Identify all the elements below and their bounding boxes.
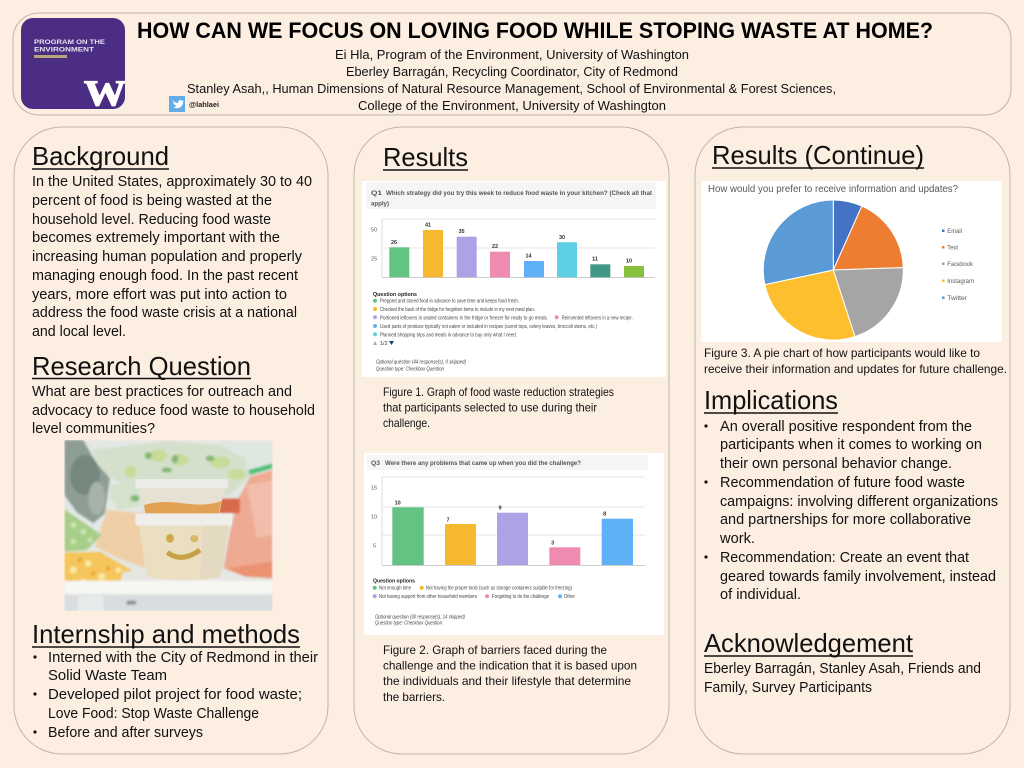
chart: figure 1 food waste strategies: 41 xyxy=(425,222,431,228)
pie legend: Instagram xyxy=(947,278,974,285)
logo: Program on the Environment: PROGRAM ON THE xyxy=(34,39,106,46)
caption: figure 3 xyxy=(704,346,1007,376)
caption: figure 2: challenge and the indication that it is based upon xyxy=(383,658,637,672)
list: implications: An overall positive respondent from the xyxy=(720,419,972,435)
caption: figure 2: the barriers. xyxy=(383,690,445,704)
caption: figure 1: that participants selected to use during their xyxy=(383,400,597,414)
chart: figure 1 food waste strategies: Checked the back of the fridge for forgotten items to include in my next meal plan. xyxy=(380,307,535,313)
icon: twitter xyxy=(169,96,185,112)
chart: figure 1 food waste strategies: Which strategy did you try this week to reduce food waste in your kitchen? (Check all that xyxy=(386,190,653,197)
text: background paragraph: becomes extremely important with the xyxy=(32,230,280,246)
chart: figure 1 food waste strategies: 50 xyxy=(371,228,377,234)
chart: figure 1 food waste strategies: Optional question (44 response(s), 0 skipped) xyxy=(376,360,466,366)
authors xyxy=(187,47,836,113)
text: acknowledgement: Family, Survey Participants xyxy=(704,680,872,696)
chart: figure 2 barriers: 5 xyxy=(373,544,376,550)
authors: College of the Environment, University of Washington xyxy=(358,98,666,113)
chart: figure 1 food waste strategies: 11 xyxy=(592,256,598,262)
list: internship and methods: Solid Waste Team xyxy=(48,668,167,684)
caption: figure 1: Figure 1. Graph of food waste reduction strategies xyxy=(383,385,614,399)
chart: figure 1 food waste strategies: 10 xyxy=(626,258,632,264)
chart: figure 1 food waste strategies: Q1 xyxy=(371,190,383,197)
text: background paragraph xyxy=(32,174,312,340)
chart: figure 2 barriers: Not enough time xyxy=(379,586,411,592)
title: HOW CAN WE FOCUS ON LOVING FOOD WHILE STOPING WASTE AT HOME? xyxy=(137,18,933,43)
text: research question xyxy=(32,384,315,437)
text: background paragraph: years, more effort was put into action to xyxy=(32,287,287,303)
chart: figure 1 food waste strategies: Reinvented leftovers in a new recipe. xyxy=(562,315,633,321)
text: background paragraph: and local level. xyxy=(32,324,126,340)
text: background paragraph: address the food waste crisis at a national xyxy=(32,305,297,321)
pie legend xyxy=(942,228,974,302)
chart: figure 1 food waste strategies: 30 xyxy=(559,235,565,241)
heading: Internship and methods: Internship and methods xyxy=(32,619,300,649)
chart: figure 1 food waste strategies: Planned shopping trips and meals in advance to buy only what I need. xyxy=(380,332,517,338)
list: implications: participants when it comes to working on xyxy=(720,437,982,453)
chart: figure 2 barriers: Optional question (30 response(s), 14 skipped) xyxy=(375,614,465,620)
chart: figure 2 barriers: Not having the proper tools (such as storage containers suitable for freezing) xyxy=(426,586,572,592)
pie legend: Email xyxy=(947,228,962,235)
chart: figure 2 barriers: Question options xyxy=(373,578,415,584)
caption: figure 2: Figure 2. Graph of barriers faced during the xyxy=(383,643,607,657)
chart: figure 2 barriers: Q3 xyxy=(371,460,380,467)
list: internship and methods: Before and after surveys xyxy=(48,725,203,741)
chart: figure 2 barriers: Were there any problems that came up when you did the challenge? xyxy=(385,460,581,467)
list: implications xyxy=(704,419,998,603)
pie slices xyxy=(763,200,903,340)
panel: left column xyxy=(14,127,328,754)
chart: figure 1 food waste strategies: Prepped and stored food in advance to save time and keeps food fresh. xyxy=(380,298,519,304)
list: internship and methods xyxy=(33,650,318,741)
chart: figure 1 food waste strategies: 25 xyxy=(371,256,377,262)
panel: right column xyxy=(695,127,1010,754)
chart: figure 2 barriers: 8 xyxy=(603,512,606,518)
chart: figure 1 food waste strategies: 14 xyxy=(525,254,532,260)
authors: Eberley Barragán, Recycling Coordinator, City of Redmond xyxy=(346,64,678,79)
list: implications: of individual. xyxy=(720,587,801,603)
chart: figure 2 barriers xyxy=(364,453,664,635)
heading: Background: Background xyxy=(32,141,169,171)
top container xyxy=(135,479,228,513)
list: implications: Recommendation of future food waste xyxy=(720,475,965,491)
list: internship and methods: Interned with the City of Redmond in their xyxy=(48,650,318,666)
heading: Acknowledgement: Acknowledgement xyxy=(704,628,914,658)
header banner xyxy=(13,13,1011,115)
list: internship and methods: Love Food: Stop Waste Challenge xyxy=(48,706,259,722)
heading: Research Question: Research Question xyxy=(32,351,251,381)
chart: figure 1 food waste strategies: 22 xyxy=(492,244,498,250)
authors: Ei Hla, Program of the Environment, University of Washington xyxy=(335,47,689,62)
chart: figure 2 barriers: 9 xyxy=(498,506,502,512)
caption: figure 2 xyxy=(383,643,637,704)
chart: figure 2 barriers: Question type: Checkbox Question xyxy=(375,620,442,626)
list: implications: geared towards family involvement, instead xyxy=(720,569,996,585)
chart: figure 1 food waste strategies: apply) xyxy=(371,200,389,208)
logo: Program on the Environment xyxy=(21,18,126,113)
list: implications: Recommendation: Create an event that xyxy=(720,550,969,566)
text: research question: What are best practices for outreach and xyxy=(32,384,292,400)
text: background paragraph: managing enough food. In the past recent xyxy=(32,268,298,284)
chart: figure 1 food waste strategies: Question type: Checkbox Question xyxy=(376,366,444,372)
text: acknowledgement xyxy=(704,661,981,696)
heading: Implications: Implications xyxy=(704,385,838,415)
heading: Results (Continue): Results (Continue) xyxy=(712,140,924,170)
chart: figure 2 barriers: Forgetting to do the challenge xyxy=(492,594,549,600)
chart: figure 3 pie chart xyxy=(701,181,1002,342)
bottom container with smiley xyxy=(135,514,232,580)
chart: figure 1 food waste strategies: 26 xyxy=(391,240,397,246)
logo: Program on the Environment: ENVIRONMENT xyxy=(34,46,94,54)
twitter handle: @lahlaei xyxy=(189,100,219,109)
chart: figure 2 barriers: 10 xyxy=(395,500,401,506)
logo: Program on the Environment: W xyxy=(84,73,126,113)
chart: figure 3 pie chart: How would you prefer to receive information and updates? xyxy=(708,184,958,195)
caption: figure 1: challenge. xyxy=(383,416,430,430)
heading: Results: Results xyxy=(383,142,468,172)
caption: figure 3: receive their information and updates for future challenge. xyxy=(704,362,1007,376)
text: background paragraph: In the United States, approximately 30 to 40 xyxy=(32,174,312,190)
chart: figure 2 barriers: 10 xyxy=(371,514,377,520)
chart: figure 2 barriers: 15 xyxy=(371,486,377,492)
chart: figure 1 food waste strategies: Question options xyxy=(373,292,417,298)
text: background paragraph: increasing human population and properly xyxy=(32,249,303,265)
pie legend: Twitter xyxy=(947,295,968,302)
panel: middle column xyxy=(354,127,669,754)
chart: figure 1 food waste strategies xyxy=(362,181,666,377)
text: background paragraph: household level. Reducing food waste xyxy=(32,212,271,228)
authors: Stanley Asah,, Human Dimensions of Natural Resource Management, School of Environmental & Forest Sciences, xyxy=(187,81,836,96)
list: internship and methods: Developed pilot project for food waste; xyxy=(48,687,302,703)
pie legend: Facebook xyxy=(947,261,974,268)
caption: figure 2: the individuals and their lifestyle that determine xyxy=(383,674,631,688)
text: background paragraph: percent of food is being wasted at the xyxy=(32,193,272,209)
text: research question: level communities? xyxy=(32,421,155,437)
list: implications: work. xyxy=(719,531,755,547)
chart: figure 1 food waste strategies: 35 xyxy=(458,229,465,235)
photo: frozen food containers xyxy=(64,440,273,611)
list: implications: campaigns: involving different organizations xyxy=(720,494,998,510)
list: implications: and partnerships for more collaborative xyxy=(720,512,971,528)
chart: figure 2 barriers: 7 xyxy=(446,518,450,524)
text: research question: advocacy to reduce food waste to household xyxy=(32,403,315,419)
chart: figure 2 barriers: 3 xyxy=(551,540,554,546)
caption: figure 1 xyxy=(383,385,614,430)
chart: figure 1 food waste strategies: Portioned leftovers in sealed containers in the fridge or freezer for ready to go meals. xyxy=(380,315,548,321)
caption: figure 3: Figure 3. A pie chart of how participants would like to xyxy=(704,346,980,360)
text: acknowledgement: Eberley Barragán, Stanley Asah, Friends and xyxy=(704,661,981,677)
chart: figure 2 barriers: Not having support from other household members xyxy=(379,594,477,600)
chart: figure 2 barriers: Other xyxy=(564,594,575,600)
pie legend: Text xyxy=(947,244,958,252)
list: implications: their own personal behavior change. xyxy=(720,456,952,472)
chart: figure 1 food waste strategies: Used parts of produce typically not eaten or included in recipes (carrot tops, celery leaves, broccoli stems, etc.) xyxy=(380,324,597,330)
chart: figure 1 food waste strategies: 1/2 xyxy=(380,341,388,347)
